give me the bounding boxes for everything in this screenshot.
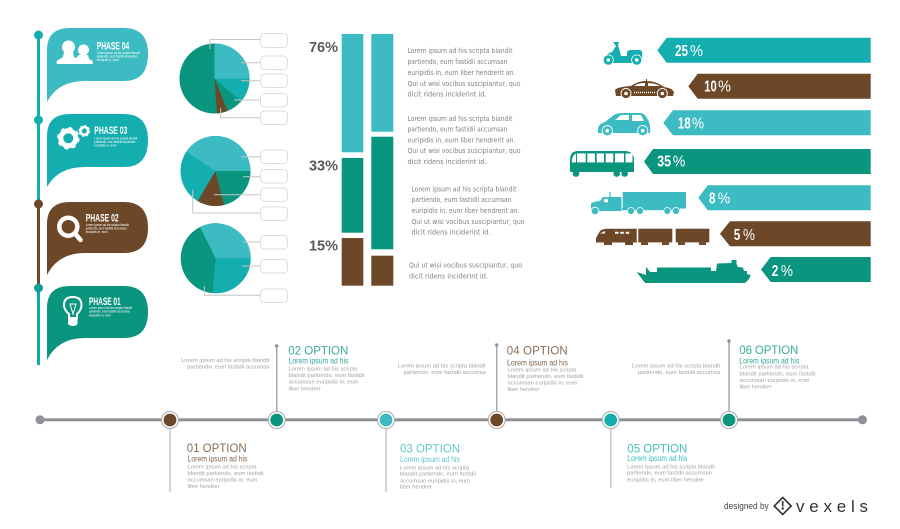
text block 4 [409, 260, 522, 280]
phase 03 bubble [47, 114, 148, 187]
arrow bar: 18%: % [692, 116, 704, 133]
option 03: Lorem ipsum ad his scripta [400, 465, 470, 471]
note left of option 06: Lorem ipsum ad his scripta blandit [632, 363, 720, 369]
option 04: 04 OPTION [507, 346, 568, 358]
percentage labels: 76% [309, 39, 338, 56]
option 01: accumsan euripidis in, eum [188, 478, 258, 484]
option 01: liber hendrer [188, 484, 220, 490]
text block 2: dicit ridens inciderint id. [408, 157, 486, 166]
option 01: 01 OPTION [187, 443, 247, 455]
option 06 [739, 345, 816, 391]
text block 1: Qui ut wisi vocibus suscipiantur, quo [408, 79, 521, 88]
arrow bar: 25% [657, 38, 871, 63]
option 01: Lorem ipsum ad his [188, 455, 248, 464]
percentage labels [309, 39, 338, 254]
icon: light bulb [64, 297, 82, 326]
option 03: blandit partiendo, eum fastidii [400, 472, 476, 478]
arrow bar: 5%: % [743, 227, 755, 244]
phase 01 bubble: PHASE 01 [89, 296, 121, 308]
vertical phase line [34, 30, 43, 365]
text block 1: euripidis in, eum liber hendrerit an. [408, 68, 516, 77]
option 04: Lorem ipsum ad his scripta [508, 367, 577, 373]
arrow bar: 5%: 5 [734, 227, 740, 244]
text block 3 [412, 184, 525, 236]
option 02: blandit partiendo, eum fastidii [288, 373, 364, 379]
option 05: Lorem ipsum ad his scripta blandit [627, 464, 715, 470]
logo: designed by vexels: designed by [724, 501, 769, 512]
arrow bar: 35%: % [673, 154, 685, 171]
phase 01 bubble: partiendo, eum fastidii accumsan [89, 310, 130, 314]
text block 3: partiendo, eum fastidii accumsan [412, 195, 512, 204]
arrow bar: 2%: % [781, 263, 793, 280]
pie chart 1 [180, 34, 288, 124]
percentage labels: 33% [309, 158, 338, 174]
arrow bar: 8% [698, 185, 871, 210]
option 04: accumsan euripidis in, eum [508, 381, 578, 387]
phase 01 bubble: euripidis in, eum [89, 314, 111, 318]
text block 2: Lorem ipsum ad his scripta blandit [408, 114, 513, 123]
note left of option 06: partiendo, eum fastidii accumsa [638, 370, 721, 376]
phase 03 bubble: PHASE 03 [94, 125, 127, 137]
icon: people [57, 40, 93, 64]
icon: bus [570, 151, 634, 177]
option 05: Lorem ipsum ad his [627, 454, 687, 463]
panel: phases timeline [34, 28, 148, 365]
option 02: liber hendrer [288, 386, 321, 392]
option 05: euripidis in, eum liber hendrer [627, 477, 704, 483]
option 03: liber hendrer [400, 485, 432, 491]
option 06: 06 OPTION [739, 345, 798, 357]
phase 02 bubble: PHASE 02 [86, 213, 119, 225]
text block 3: Qui ut wisi vocibus suscipiantur, quo [412, 217, 525, 226]
phase 04 bubble: partiendo, eum fastidii accumsan [97, 54, 138, 58]
option 05 [627, 443, 715, 483]
arrow bar: 2% [761, 257, 871, 282]
phase 04 bubble: euripidis in, eum [97, 58, 119, 62]
phase 03 bubble: partiendo, eum fastidii accumsan [94, 140, 135, 144]
icon: ship [637, 260, 751, 283]
option 06: accumsan euripidis in, eum [740, 378, 810, 384]
phase 04 bubble: Lorem ipsum ad his scripta blandit [97, 51, 140, 55]
timeline nodes [162, 412, 738, 428]
option 06: liber hendrer [740, 385, 772, 391]
text block 4: Qui ut wisi vocibus suscipiantur, quo [409, 260, 522, 270]
text block 1 [408, 46, 521, 98]
icon: magnifier [59, 218, 80, 240]
option 03: accumsan euripidis in, eum [400, 478, 470, 484]
arrow bar: 5% [720, 221, 871, 246]
note left of option 02: partiendo, eum fastidii accumsa [187, 364, 270, 370]
arrow bar: 25%: 25 [675, 43, 688, 60]
icon: car [598, 113, 650, 136]
option 03: Lorem ipsum ad his [400, 455, 460, 464]
arrow bar: 8%: % [718, 191, 730, 208]
arrow bar: 35% [644, 149, 871, 174]
pie chart 3 [181, 223, 288, 302]
percentage labels: 15% [309, 238, 338, 254]
phase 02 bubble [47, 202, 148, 275]
icon: scooter [603, 42, 642, 66]
option 02 [288, 346, 364, 392]
text block 2: partiendo, eum fastidii accumsan [408, 124, 508, 134]
arrow bar: 10%: % [718, 79, 731, 96]
phase 01 bubble [47, 286, 148, 360]
text block 2: euripidis in, eum liber hendrerit an. [408, 136, 516, 144]
option 04 [507, 346, 584, 393]
phase 02 bubble: euripidis in, eum [86, 230, 108, 234]
pie chart 2 [180, 136, 288, 220]
option 05: partiendo, eum fastidii accumsan [627, 471, 712, 477]
phase 04 bubble [47, 28, 148, 102]
option 04: liber hendrer [508, 387, 540, 393]
text block 3: dicit ridens inciderint id. [412, 228, 490, 236]
text block 3: Lorem ipsum ad his scripta blandit [412, 184, 517, 194]
icon: train [596, 229, 709, 245]
arrow bar: 18% [663, 110, 871, 135]
phase 04 bubble: PHASE 04 [97, 40, 130, 52]
phase 03 bubble: Lorem ipsum ad his scripta blandit [94, 136, 137, 140]
option 06: Lorem ipsum ad his scripta [740, 365, 809, 371]
option 04: blandit partiendo, eum fastidii [508, 374, 584, 380]
text block 2 [408, 114, 521, 166]
arrow bar: 25%: % [690, 43, 703, 60]
option 01: Lorem ipsum ad his scripta [188, 465, 257, 471]
phase 03 bubble: euripidis in, eum [94, 143, 117, 147]
arrow bar: 2%: 2 [772, 263, 778, 280]
option 05: 05 OPTION [627, 443, 687, 455]
note left of option 06 [632, 363, 721, 376]
logo: designed by vexels: vexels [796, 497, 868, 516]
icon: truck [591, 192, 686, 215]
text block 3: euripidis in, eum liber hendrerit an. [412, 206, 520, 215]
arrow bar: 10%: 10 [704, 79, 717, 96]
note left of option 04: Lorem ipsum ad his scripta blandit [398, 363, 486, 369]
arrow bar: 10% [688, 74, 871, 99]
option 06: Lorem ipsum ad his [739, 356, 799, 365]
text block 1: Lorem ipsum ad his scripta blandit [408, 46, 513, 55]
horizontal timeline [36, 339, 867, 492]
logo: designed by vexels [724, 497, 868, 516]
option 06: blandit partiendo, eum fastidii [740, 371, 816, 377]
option 02: accumsan euripidis in, eum [288, 380, 359, 386]
text block 1: partiendo, eum fastidii accumsan [408, 57, 508, 66]
note left of option 02 [181, 358, 270, 370]
phase 02 bubble: Lorem ipsum ad his scripta blandit [86, 223, 129, 227]
note left of option 04 [398, 363, 486, 376]
connector stems [169, 339, 731, 492]
arrow bar: 35%: 35 [657, 154, 671, 171]
option 04: Lorem ipsum ad his [507, 359, 568, 368]
option 02: Lorem ipsum ad his [288, 356, 348, 365]
phase 01 bubble: Lorem ipsum ad his scripta blandit [89, 306, 132, 310]
text block 2: Qui ut wisi vocibus suscipiantur, quo [408, 146, 521, 155]
option 01: blandit partiendo, eum fastidii [188, 471, 264, 477]
icon: gears [59, 126, 89, 148]
arrow bar: 18%: 18 [678, 116, 691, 133]
text block 4: dicit ridens inciderint id. [409, 272, 488, 280]
option 01 [187, 443, 264, 490]
phase 02 bubble: partiendo, eum fastidii accumsan [86, 226, 127, 230]
note left of option 02: Lorem ipsum ad his scripta blandit [181, 358, 270, 364]
icon: taxi [615, 79, 674, 99]
stacked bar chart [309, 34, 393, 286]
option 02: 02 OPTION [288, 346, 348, 358]
option 02: Lorem ipsum ad his scripta [288, 366, 358, 372]
note left of option 04: partiendo, eum fastidii accumsa [404, 370, 486, 376]
option 03: 03 OPTION [400, 443, 460, 455]
option 03 [400, 443, 476, 491]
text block 1: dicit ridens inciderint id. [408, 90, 486, 98]
arrow bar: 8%: 8 [709, 191, 716, 208]
